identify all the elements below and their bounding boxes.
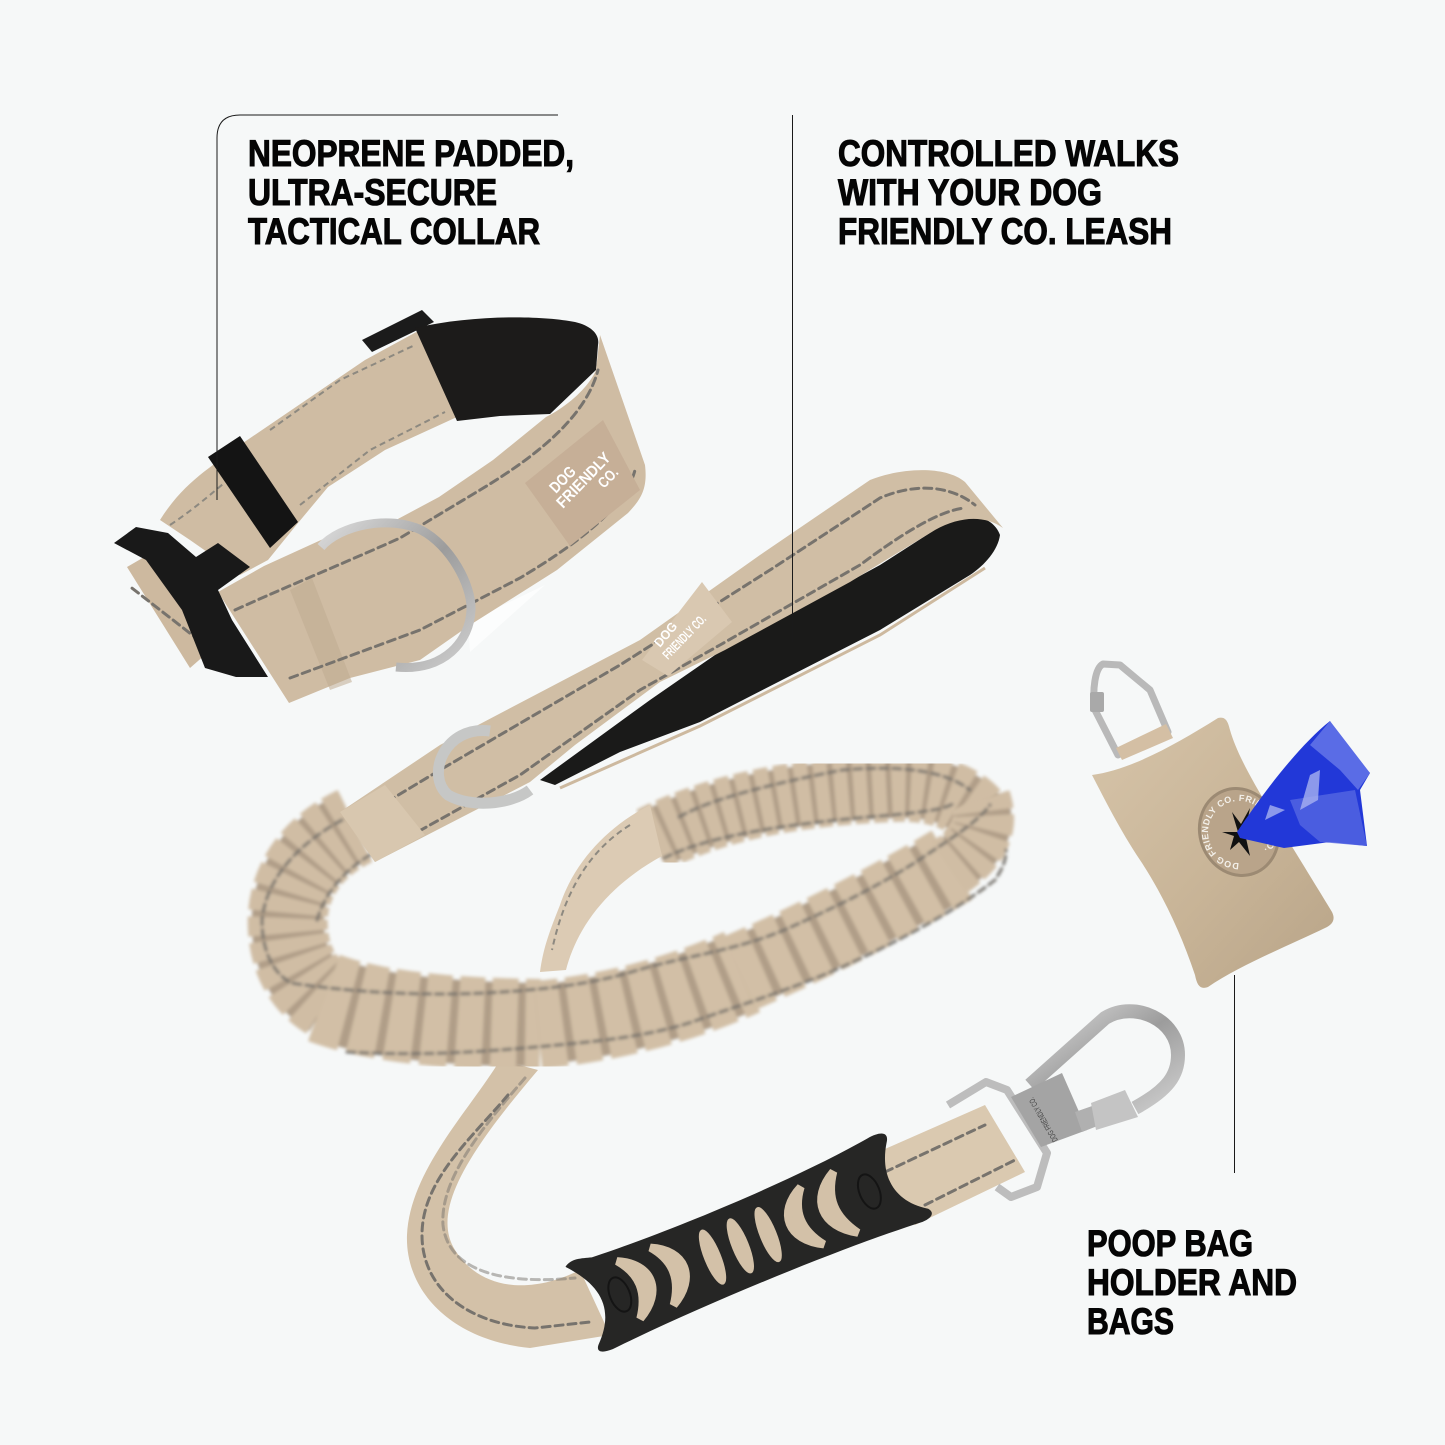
heading: leash — [838, 133, 1179, 252]
snap hook: DOG FRIENDLY CO. — [1027, 1096, 1060, 1144]
heading: poop bag holder — [1087, 1223, 1297, 1342]
collar — [114, 310, 646, 703]
collar shine under ring — [468, 585, 545, 652]
heading: poop bag holder: BAGS — [1087, 1301, 1174, 1342]
pouch body — [1092, 718, 1334, 988]
bungee upper run — [740, 865, 952, 973]
heading: leash: WITH YOUR DOG — [838, 172, 1102, 213]
collar top keeper — [362, 310, 434, 352]
leash handle — [340, 470, 1003, 862]
heading: collar — [248, 133, 574, 252]
grip crescent cutouts — [616, 1172, 858, 1320]
handle logo patch: DOG — [651, 619, 680, 650]
handle D ring — [438, 731, 530, 803]
heading: collar: NEOPRENE PADDED, — [248, 133, 574, 174]
strap to snap hook — [860, 1105, 1025, 1225]
collar D ring — [321, 523, 471, 668]
collar black buckle — [114, 527, 268, 677]
heading: leash: CONTROLLED WALKS — [838, 133, 1179, 174]
rubber grip with cutouts — [563, 1126, 934, 1354]
heading: leash: FRIENDLY CO. LEASH — [838, 211, 1172, 252]
collar rear strap — [160, 330, 457, 575]
bungee left turn — [288, 826, 355, 1000]
bungee middle run — [538, 972, 742, 1025]
bungee rear section — [652, 768, 985, 858]
collar logo patch: CO. — [595, 464, 622, 492]
callout line: leash — [792, 115, 794, 642]
holder strap — [1116, 724, 1173, 760]
callout line: collar — [217, 115, 558, 500]
collar outer band — [218, 335, 646, 703]
collar black strap keeper — [208, 436, 298, 548]
bungee stitching — [262, 805, 1006, 1054]
bungee front section — [262, 800, 1006, 1054]
handle neoprene lining — [540, 516, 1000, 785]
heading: collar: ULTRA-SECURE — [248, 172, 497, 213]
collar logo patch: FRIENDLY — [554, 449, 615, 512]
collar neoprene lining — [415, 317, 598, 421]
handle tan webbing — [340, 470, 1003, 862]
snap hook — [948, 1011, 1178, 1197]
collar buckle tab — [127, 545, 222, 668]
leash loose strap section — [540, 805, 662, 972]
medallion: DOG FRIENDLY CO. FRIENDLY CO. — [1202, 794, 1274, 870]
poop bag holder — [1090, 660, 1370, 988]
callout line: poop bag holder — [1234, 975, 1236, 1173]
collar logo patch: DOG — [547, 463, 580, 497]
heading: collar: TACTICAL COLLAR — [248, 211, 540, 252]
handle logo patch — [642, 582, 732, 676]
heading: poop bag holder: HOLDER AND — [1087, 1262, 1297, 1303]
holder carabiner — [1094, 664, 1168, 755]
handle logo patch: FRIENDLY CO. — [659, 611, 709, 662]
leash bungee junction sleeve — [340, 785, 425, 862]
bungee right turn — [950, 800, 983, 867]
heading: poop bag holder: POOP BAG — [1087, 1223, 1253, 1264]
collar logo patch — [525, 420, 640, 546]
bungee bottom run — [324, 998, 540, 1025]
leash lower strap — [407, 1060, 610, 1348]
blue bag — [1237, 721, 1370, 848]
carabiner barrel — [1090, 692, 1104, 712]
